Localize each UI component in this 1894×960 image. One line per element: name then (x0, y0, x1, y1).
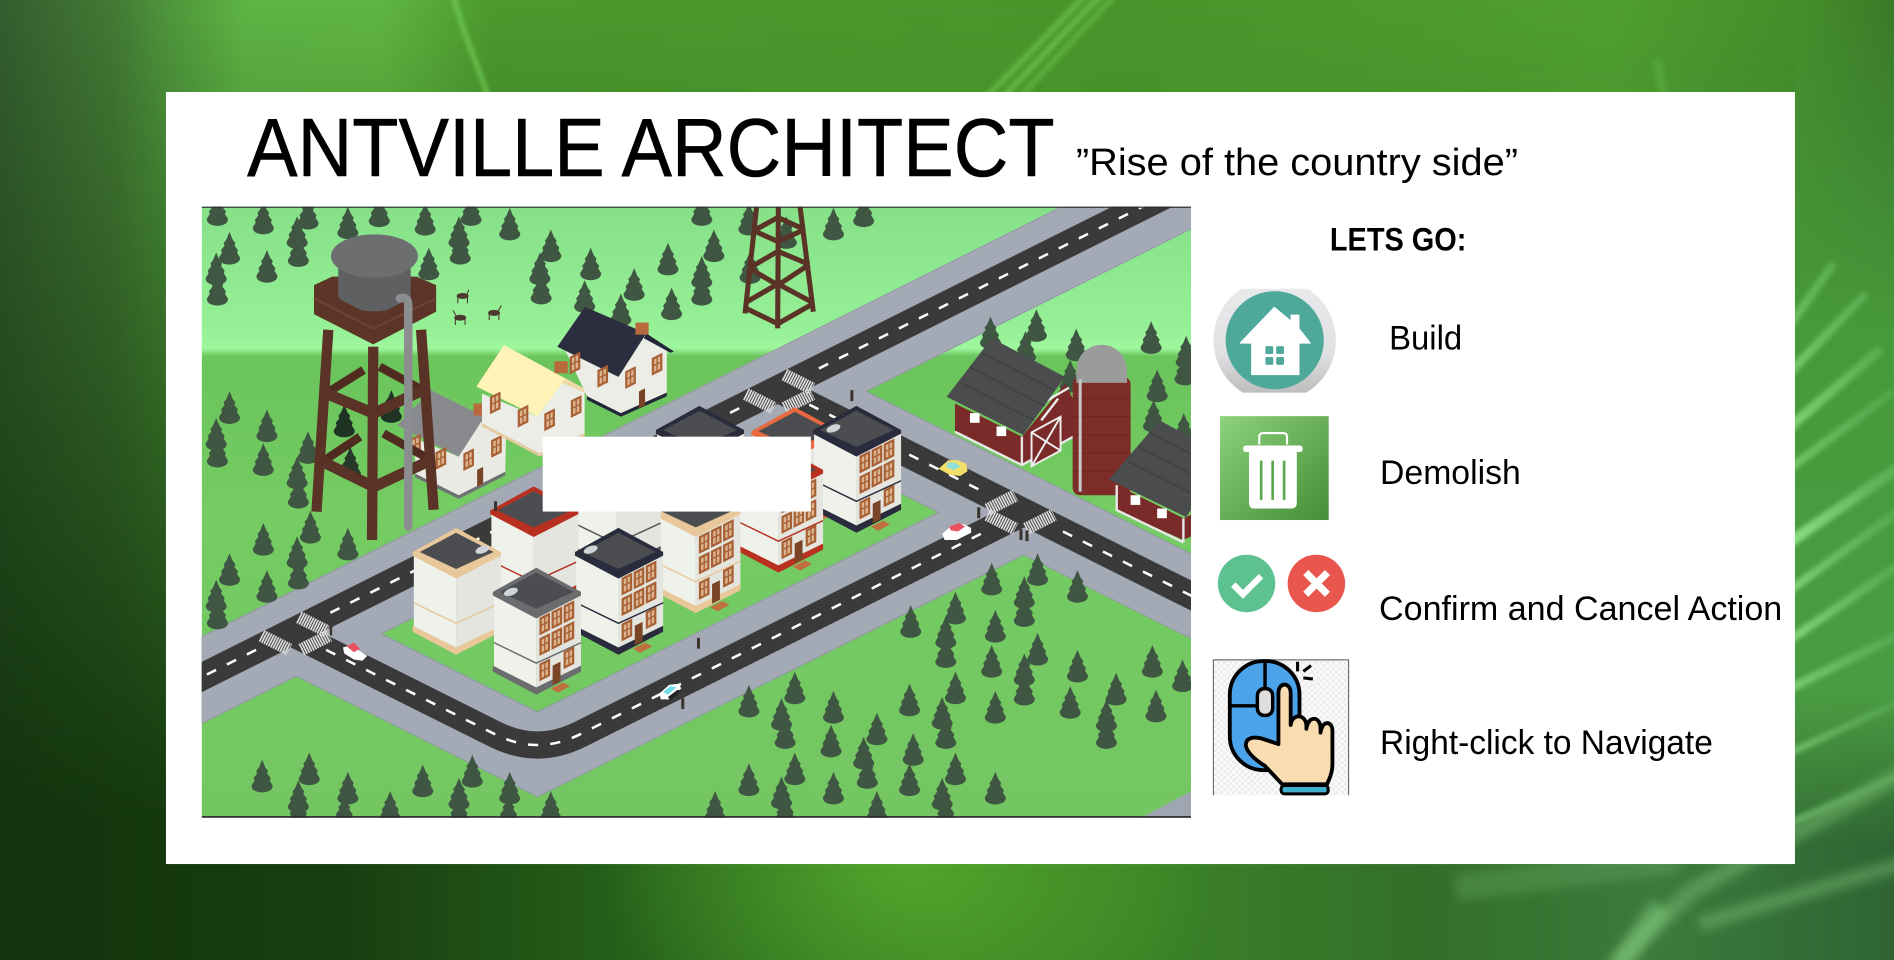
pine trees (206, 193, 1197, 829)
dark-roof house (557, 307, 674, 417)
label: build: Build (1389, 320, 1462, 358)
silo (1073, 345, 1131, 495)
label: demolish: Demolish (1380, 454, 1521, 492)
label: confirm and cancel: Confirm and Cancel Action (1379, 590, 1782, 628)
game screenshot: isometric town (202, 206, 1191, 818)
barn (947, 338, 1073, 466)
icon: cancel (1288, 555, 1345, 612)
crosswalks (262, 375, 1054, 650)
sidewalks (202, 206, 1191, 818)
heading: lets go: LETS GO: (1330, 222, 1466, 258)
subtitle: ”Rise of the country side” (1076, 142, 1518, 184)
asphalt roads (202, 206, 1191, 759)
icon: confirm (1218, 555, 1275, 612)
icon: build (1214, 288, 1336, 393)
gray-roof house (397, 390, 511, 499)
cream-roof house (476, 345, 592, 457)
deer (453, 290, 501, 325)
road centre dashes (193, 174, 1208, 745)
icon: demolish trash can (1220, 416, 1329, 520)
label: right-click: Right-click to Navigate (1380, 724, 1713, 762)
screenshot border lines (202, 207, 1191, 818)
apartment towers (413, 406, 901, 695)
white redaction box (543, 437, 811, 512)
icon: mouse right-click (1213, 660, 1349, 795)
second barn (1109, 420, 1191, 542)
cars and pedestrians (330, 390, 1029, 709)
water tower (314, 234, 436, 540)
white panel (145, 92, 1795, 864)
lattice tower (745, 207, 813, 328)
title: ANTVILLE ARCHITECT (247, 103, 1055, 194)
